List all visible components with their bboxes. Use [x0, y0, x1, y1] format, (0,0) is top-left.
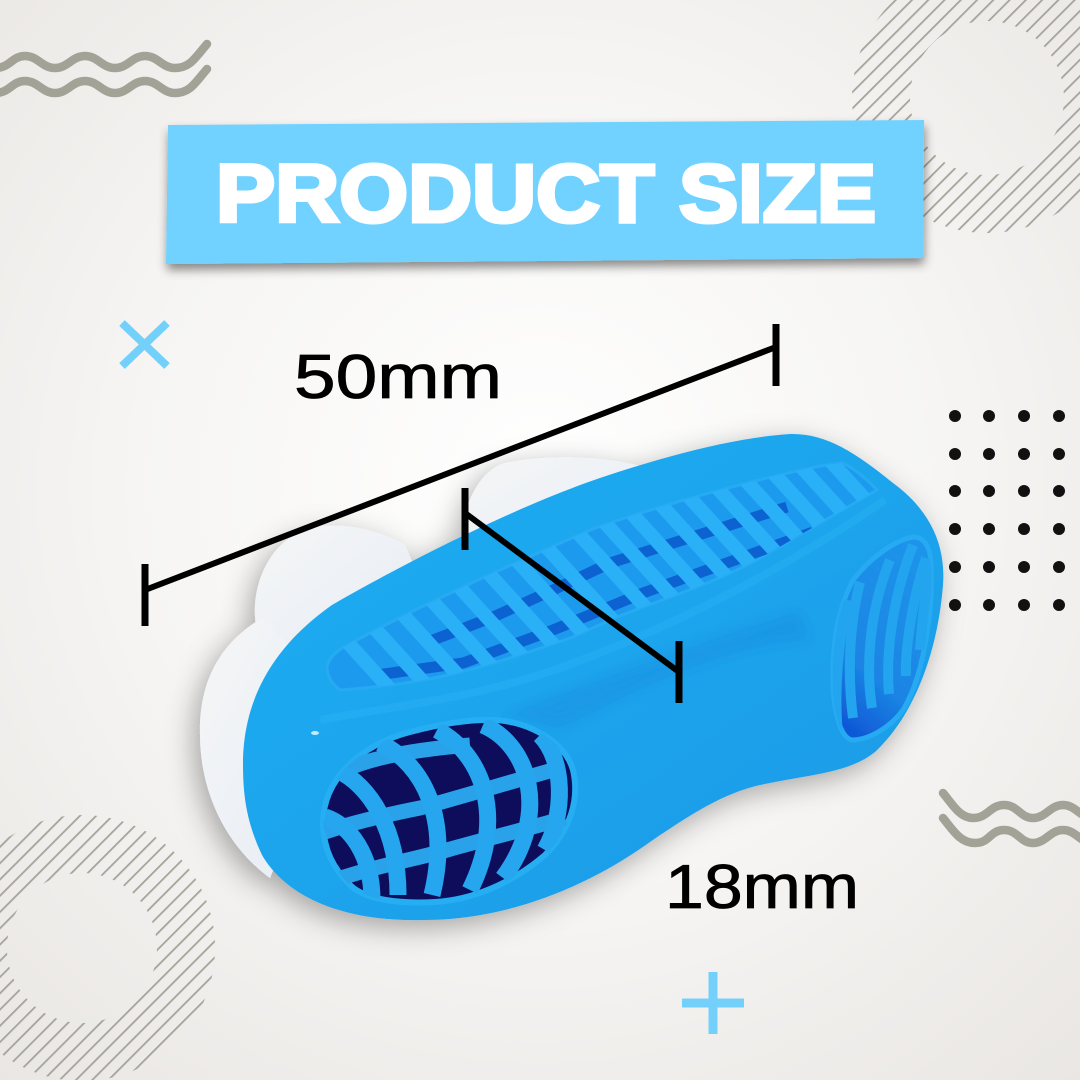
- product: nose filter: [200, 434, 943, 920]
- decoration: top-left waves: [0, 44, 207, 93]
- decoration: right waves: [943, 793, 1080, 843]
- side vent recess: [833, 537, 931, 740]
- side vent: [833, 537, 932, 740]
- white nose lobe rear left: [255, 526, 420, 660]
- front vent recess: [323, 720, 575, 902]
- icon: blue plus: [682, 972, 744, 1034]
- white nose lobe rear right: [462, 457, 660, 560]
- body highlight ridge: [320, 500, 885, 720]
- top vent slats: [344, 464, 869, 686]
- decoration: dot grid: [949, 410, 1065, 611]
- decoration: bottom-left hatched ring: [0, 815, 215, 1080]
- dimension: 50mm width line: [145, 324, 776, 626]
- label: 18mm: 18mm: [665, 853, 859, 922]
- top vent recess: [327, 463, 877, 690]
- blue body: [243, 434, 943, 920]
- icon: blue cross: [122, 323, 167, 366]
- side vent ribs: [836, 545, 932, 735]
- top vent dark slots: [377, 507, 813, 675]
- title banner: [166, 120, 924, 264]
- white nose piece front: [200, 618, 340, 878]
- dimension: 18mm depth line: [465, 488, 679, 703]
- highlight spot: [311, 731, 319, 735]
- top vent: [326, 462, 879, 692]
- front vent ribs: [325, 725, 559, 900]
- decoration: top-right hatched ring: [852, 0, 1080, 233]
- front vent cross bars: [325, 745, 565, 880]
- body shading band: [500, 610, 810, 730]
- front vent: [323, 720, 575, 902]
- title text: PRODUCT SIZE: [216, 148, 876, 240]
- label: 50mm: 50mm: [294, 343, 502, 412]
